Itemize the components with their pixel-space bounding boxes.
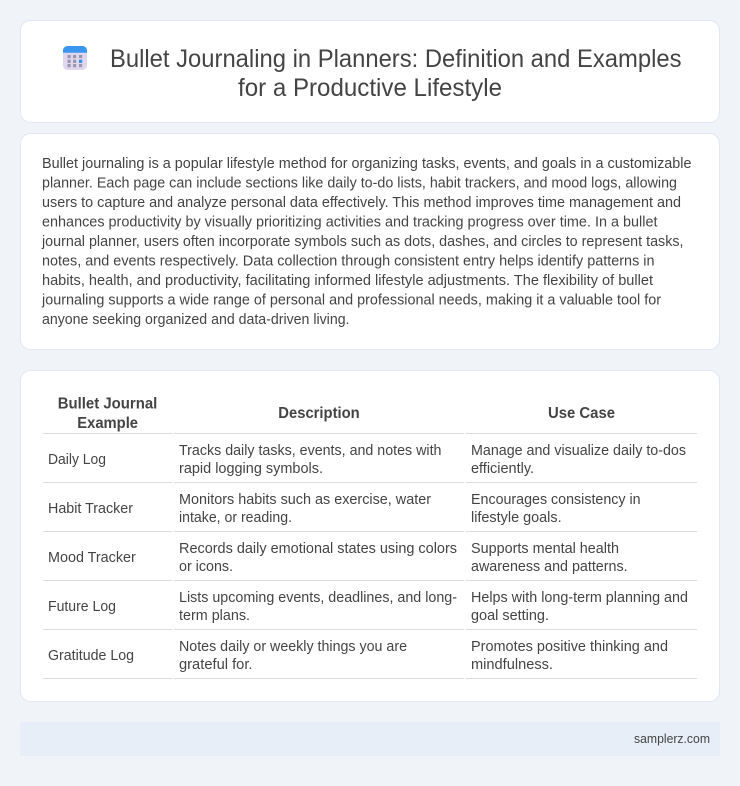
text block: paragraph: enhances productivity by visually prioritizing activities and tracking progress over time. In a bullet (42, 214, 658, 230)
text block: paragraph: anyone seeking organized and data-driven living. (42, 312, 350, 328)
text block: paragraph: journaling supports a wide range of personal and professional needs, making it a valuable tool for (41, 292, 661, 308)
table row: Daily Log: rapid logging symbols. (179, 461, 323, 477)
text block: paragraph: journal planner, users often incorporate symbols such as dots, dashes, and circles to represent tasks, (41, 234, 683, 250)
table row: Habit Tracker: Habit Tracker (48, 501, 133, 517)
text block: paragraph (41, 156, 692, 328)
table row: Gratitude Log (48, 639, 668, 673)
table row: Future Log: goal setting. (471, 608, 549, 624)
table row: Gratitude Log: Promotes positive thinking and (471, 639, 668, 655)
table row: Habit Tracker: Monitors habits such as exercise, water (179, 492, 431, 508)
table row: Habit Tracker (48, 492, 641, 526)
table header row: Bullet Journal (58, 396, 157, 412)
table row: Mood Tracker: Records daily emotional states using colors (179, 541, 457, 557)
text block: paragraph: notes, and events respectively. Data collection through consistent entry helps identify patterns in (42, 254, 654, 270)
panel: introduction paragraph (20, 134, 720, 350)
footer credit: samplerz.com (634, 732, 710, 746)
text block: paragraph: users to capture and analyze personal data effectively. This method improves time management and (42, 195, 681, 211)
table row: Mood Tracker: Mood Tracker (48, 550, 136, 566)
table row: Gratitude Log: mindfulness. (471, 657, 553, 673)
table row: Habit Tracker: Encourages consistency in (471, 492, 641, 508)
table row: Future Log: Lists upcoming events, deadlines, and long- (179, 590, 457, 606)
table row: Daily Log: Tracks daily tasks, events, and notes with (179, 443, 442, 459)
table row: Daily Log: Daily Log (48, 452, 106, 468)
table header row: Description (278, 405, 360, 422)
table header row: Use Case (548, 405, 615, 422)
text block: paragraph: Bullet journaling is a popular lifestyle method for organizing tasks, events, and goals in a customizable (42, 156, 692, 172)
table row: Future Log (48, 590, 688, 624)
table row: Future Log: Future Log (48, 599, 116, 615)
table row: Daily Log: efficiently. (471, 461, 534, 477)
text block: paragraph: habits, health, and productivity, facilitating informed lifestyle adjustments. The flexibility of bullet (42, 273, 653, 289)
table row: Daily Log (48, 443, 686, 477)
table row: Daily Log: Manage and visualize daily to-dos (471, 443, 686, 459)
table row: Habit Tracker: intake, or reading. (179, 510, 292, 526)
table row: Habit Tracker: lifestyle goals. (471, 510, 562, 526)
table row: Gratitude Log: Gratitude Log (48, 648, 134, 664)
title: Bullet Journaling in Planners: Definition and Examples (110, 45, 682, 73)
title (110, 45, 682, 102)
text block: paragraph: planner. Each page can include sections like daily to-do lists, habit trackers, and mood logs, allowing (42, 176, 677, 192)
icon: calendar (63, 46, 87, 70)
title: for a Productive Lifestyle (238, 74, 502, 102)
table header row (58, 396, 615, 432)
table row: Mood Tracker (48, 541, 628, 575)
table row: Gratitude Log: grateful for. (179, 657, 252, 673)
panel: title header (20, 20, 720, 122)
table row: Gratitude Log: Notes daily or weekly things you are (179, 639, 407, 655)
panel: examples table (20, 370, 720, 702)
table row: Mood Tracker: awareness and patterns. (471, 559, 628, 575)
table row: Mood Tracker: or icons. (179, 559, 233, 575)
footer (20, 722, 720, 756)
table header row: Example (77, 415, 138, 432)
table row: Future Log: term plans. (179, 608, 250, 624)
table row: Future Log: Helps with long-term planning and (471, 590, 688, 606)
table row: Mood Tracker: Supports mental health (471, 541, 619, 557)
